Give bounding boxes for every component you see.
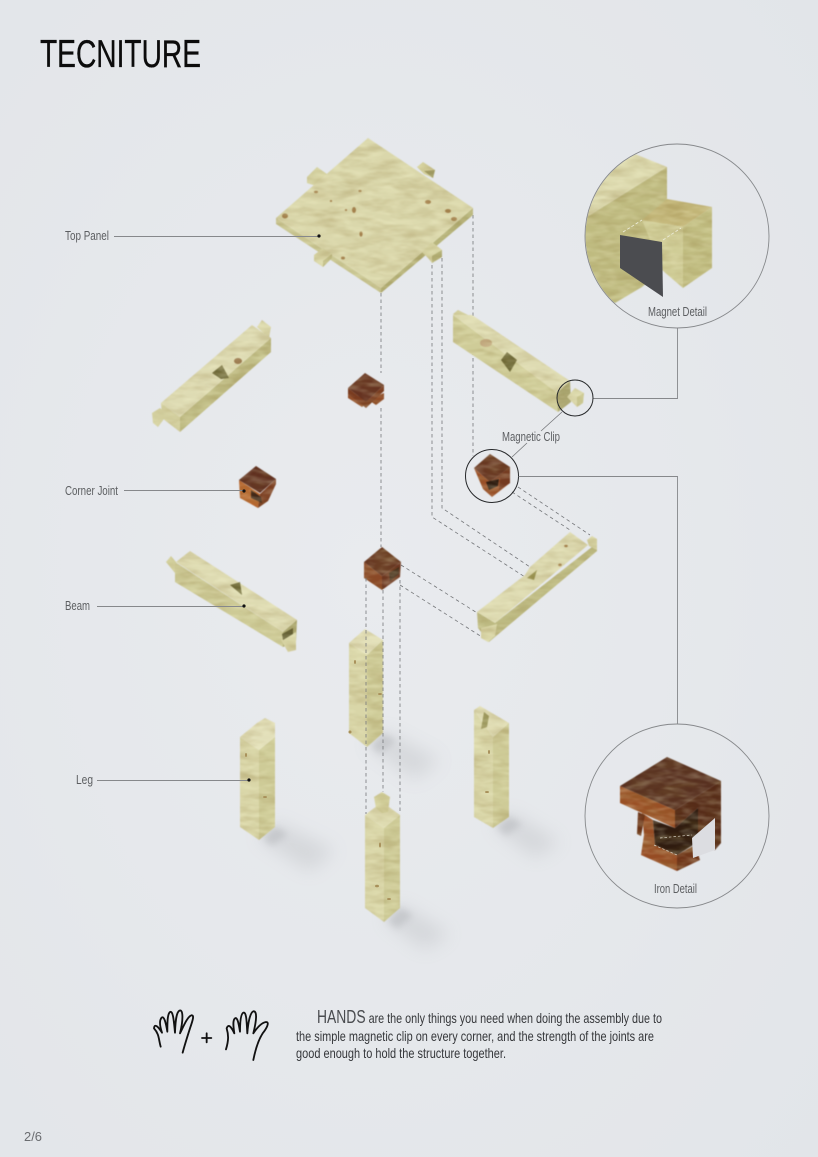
left face bbox=[453, 315, 558, 412]
big beam front bbox=[586, 166, 668, 304]
plus bbox=[202, 1033, 211, 1042]
iron plate bbox=[692, 818, 715, 858]
panel top face bbox=[276, 138, 473, 288]
label: Beam: Beam bbox=[65, 599, 90, 613]
top face bbox=[477, 532, 588, 623]
panel side faces bbox=[276, 218, 381, 293]
leg shadows bbox=[258, 730, 560, 950]
tab: upper right bbox=[417, 162, 435, 178]
label: Iron Detail: Iron Detail bbox=[654, 882, 697, 896]
back face bbox=[675, 781, 721, 850]
icon: left hand bbox=[154, 1010, 193, 1053]
knots bbox=[564, 545, 568, 547]
page number: 2/6 bbox=[24, 1129, 42, 1144]
label: Leg bbox=[76, 773, 251, 787]
leg: right bbox=[474, 706, 509, 828]
label: Corner Joint bbox=[65, 484, 246, 498]
big beam top bbox=[588, 154, 667, 218]
beam: upper left bbox=[152, 320, 271, 432]
text block: hands description: HANDS are the only things you need when doing the assembly due to bbox=[317, 1007, 662, 1027]
label: Beam bbox=[65, 599, 246, 613]
joint: upper centre bbox=[348, 373, 384, 408]
tenon bbox=[567, 388, 584, 407]
beam: upper right bbox=[453, 310, 584, 412]
label: Leg: Leg bbox=[76, 773, 93, 787]
tenon bbox=[642, 199, 712, 227]
notch bbox=[212, 365, 229, 379]
label: Corner Joint: Corner Joint bbox=[65, 484, 118, 498]
callout: magnetic clip bbox=[466, 328, 678, 724]
top face bbox=[620, 757, 721, 810]
end bbox=[283, 620, 297, 647]
knot bbox=[234, 358, 242, 364]
label: Magnet Detail: Magnet Detail bbox=[648, 305, 707, 319]
notch bbox=[501, 352, 517, 372]
text block: hands description: the simple magnetic clip on every corner, and the strength of the joints are bbox=[296, 1028, 654, 1044]
tenon far bbox=[166, 556, 176, 573]
tenons bbox=[587, 536, 597, 550]
labels and leader lines bbox=[65, 229, 321, 787]
top face bbox=[453, 315, 570, 393]
icon: right hand bbox=[226, 1011, 268, 1060]
side face bbox=[477, 543, 597, 642]
leg: labelled bbox=[240, 718, 275, 840]
top panel bbox=[276, 138, 473, 293]
label: Top Panel bbox=[65, 229, 321, 243]
joint: corner joint bbox=[239, 466, 276, 508]
side faces bbox=[161, 403, 180, 432]
wood flecks on legs bbox=[245, 660, 490, 900]
beam: lower right bbox=[477, 532, 597, 642]
tenon far bbox=[453, 310, 468, 321]
icon: hands bbox=[154, 1010, 268, 1060]
label: Top Panel: Top Panel bbox=[65, 229, 109, 243]
tab: lower left bbox=[314, 248, 332, 267]
tenons bbox=[152, 408, 167, 427]
leg: front bbox=[365, 792, 400, 922]
notch bbox=[527, 570, 537, 580]
knots bbox=[282, 190, 457, 260]
callout: magnetic clip: Magnetic Clip bbox=[502, 430, 560, 444]
tab: upper left bbox=[307, 167, 327, 186]
magnet plate bbox=[620, 235, 663, 297]
tab: lower right bbox=[422, 242, 442, 263]
knot bbox=[480, 339, 492, 347]
assembly guide lines bbox=[381, 215, 590, 637]
joint: circled clip joint bbox=[474, 454, 510, 497]
detail circle: iron bbox=[585, 724, 769, 908]
text block: hands description: good enough to hold the structure together. bbox=[296, 1045, 506, 1061]
top face bbox=[161, 325, 271, 417]
leg: rear centre bbox=[349, 629, 383, 747]
side face bbox=[175, 562, 283, 647]
text block: hands description bbox=[296, 1007, 662, 1061]
detail circle: magnet bbox=[570, 144, 769, 328]
joint: lower centre bbox=[364, 547, 401, 590]
beam: lower left bbox=[166, 551, 297, 652]
top face bbox=[176, 551, 297, 632]
end bbox=[557, 381, 571, 412]
lower joint body bbox=[641, 813, 677, 871]
left face upper bbox=[620, 786, 675, 828]
cavity bbox=[653, 808, 698, 855]
title: TECNITURE bbox=[40, 33, 201, 76]
notch bbox=[230, 582, 242, 595]
leg guide lines bbox=[366, 578, 400, 814]
